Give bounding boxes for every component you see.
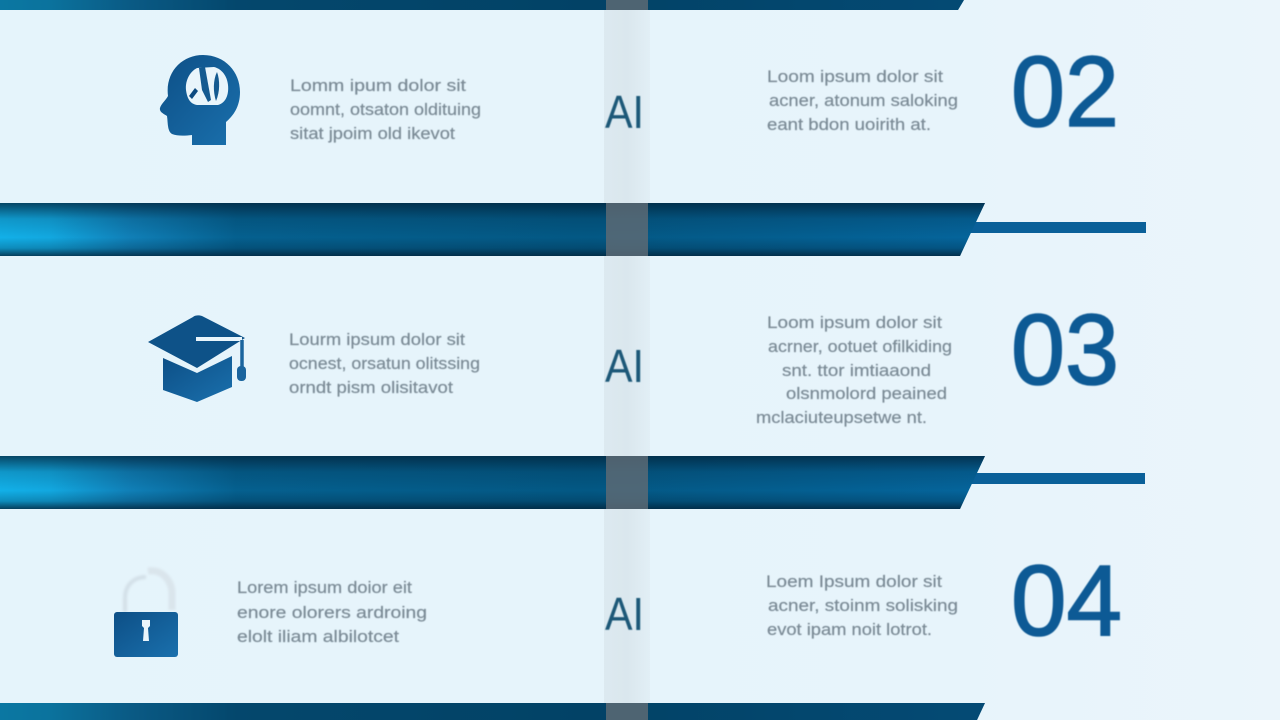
text block: row 3 right: acrner, ootuet ofilkiding [768,337,952,356]
text block: row 3 left: ocnest, orsatun olitssing [289,354,480,373]
text block: row 3 right: mclaciuteupsetwe nt. [756,408,927,427]
text block: row 2 right: eant bdon uoirith at. [767,115,931,134]
number 03: 03 [1011,294,1119,406]
band: third with connector line [0,456,1145,509]
text block: row 2 left: oomnt, otsaton oldituing [290,100,481,119]
text block: row 2 left: sitat jpoim old ikevot [290,124,455,143]
text block: row 4 right: evot ipam noit lotrot. [767,620,932,639]
text block: row 4 right: Loem Ipsum dolor sit [766,572,942,591]
icon: graduation cap [148,315,246,402]
text block: row 3 right: snt. ttor imtiaaond [782,361,931,380]
number 02: 02 [1011,36,1119,148]
text block: row 4 right: acner, stoinm solisking [768,596,958,615]
label: AI row 3: AI [605,340,644,392]
band: second with connector line [0,203,1146,256]
text block: row 4 left: elolt iliam albilotcet [237,627,399,646]
icon: head with AI [160,55,240,145]
text block: row 4 left: Lorem ipsum doior eit [237,578,412,597]
text block: row 4 right [766,572,958,639]
text block: row 2 right: acner, atonum saloking [769,91,958,110]
center vertical strip [604,0,650,720]
label: AI row 2: AI [605,86,644,138]
text block: row 4 left: enore olorers ardroing [237,603,427,622]
icon: padlock [114,571,178,657]
text block: row 2 right: Loom ipsum dolor sit [767,67,943,86]
text block: row 3 right: olsnmolord peained [786,384,947,403]
text block: row 3 right: Loom ipsum dolor sit [767,313,942,332]
text block: row 2 left [290,76,481,143]
text block: row 3 left: Lourm ipsum dolor sit [289,330,465,349]
text block: row 4 left [237,578,427,646]
text block: row 3 left [289,330,480,397]
text block: row 3 left: orndt pism olisitavot [289,378,453,397]
band: top [0,0,964,10]
number 04: 04 [1011,545,1122,657]
text block: row 2 left: Lomm ipum dolor sit [290,76,466,95]
label: AI row 4: AI [605,588,644,640]
text block: row 3 right [756,313,952,427]
band: bottom [0,703,985,720]
text block: row 2 right [767,67,958,134]
